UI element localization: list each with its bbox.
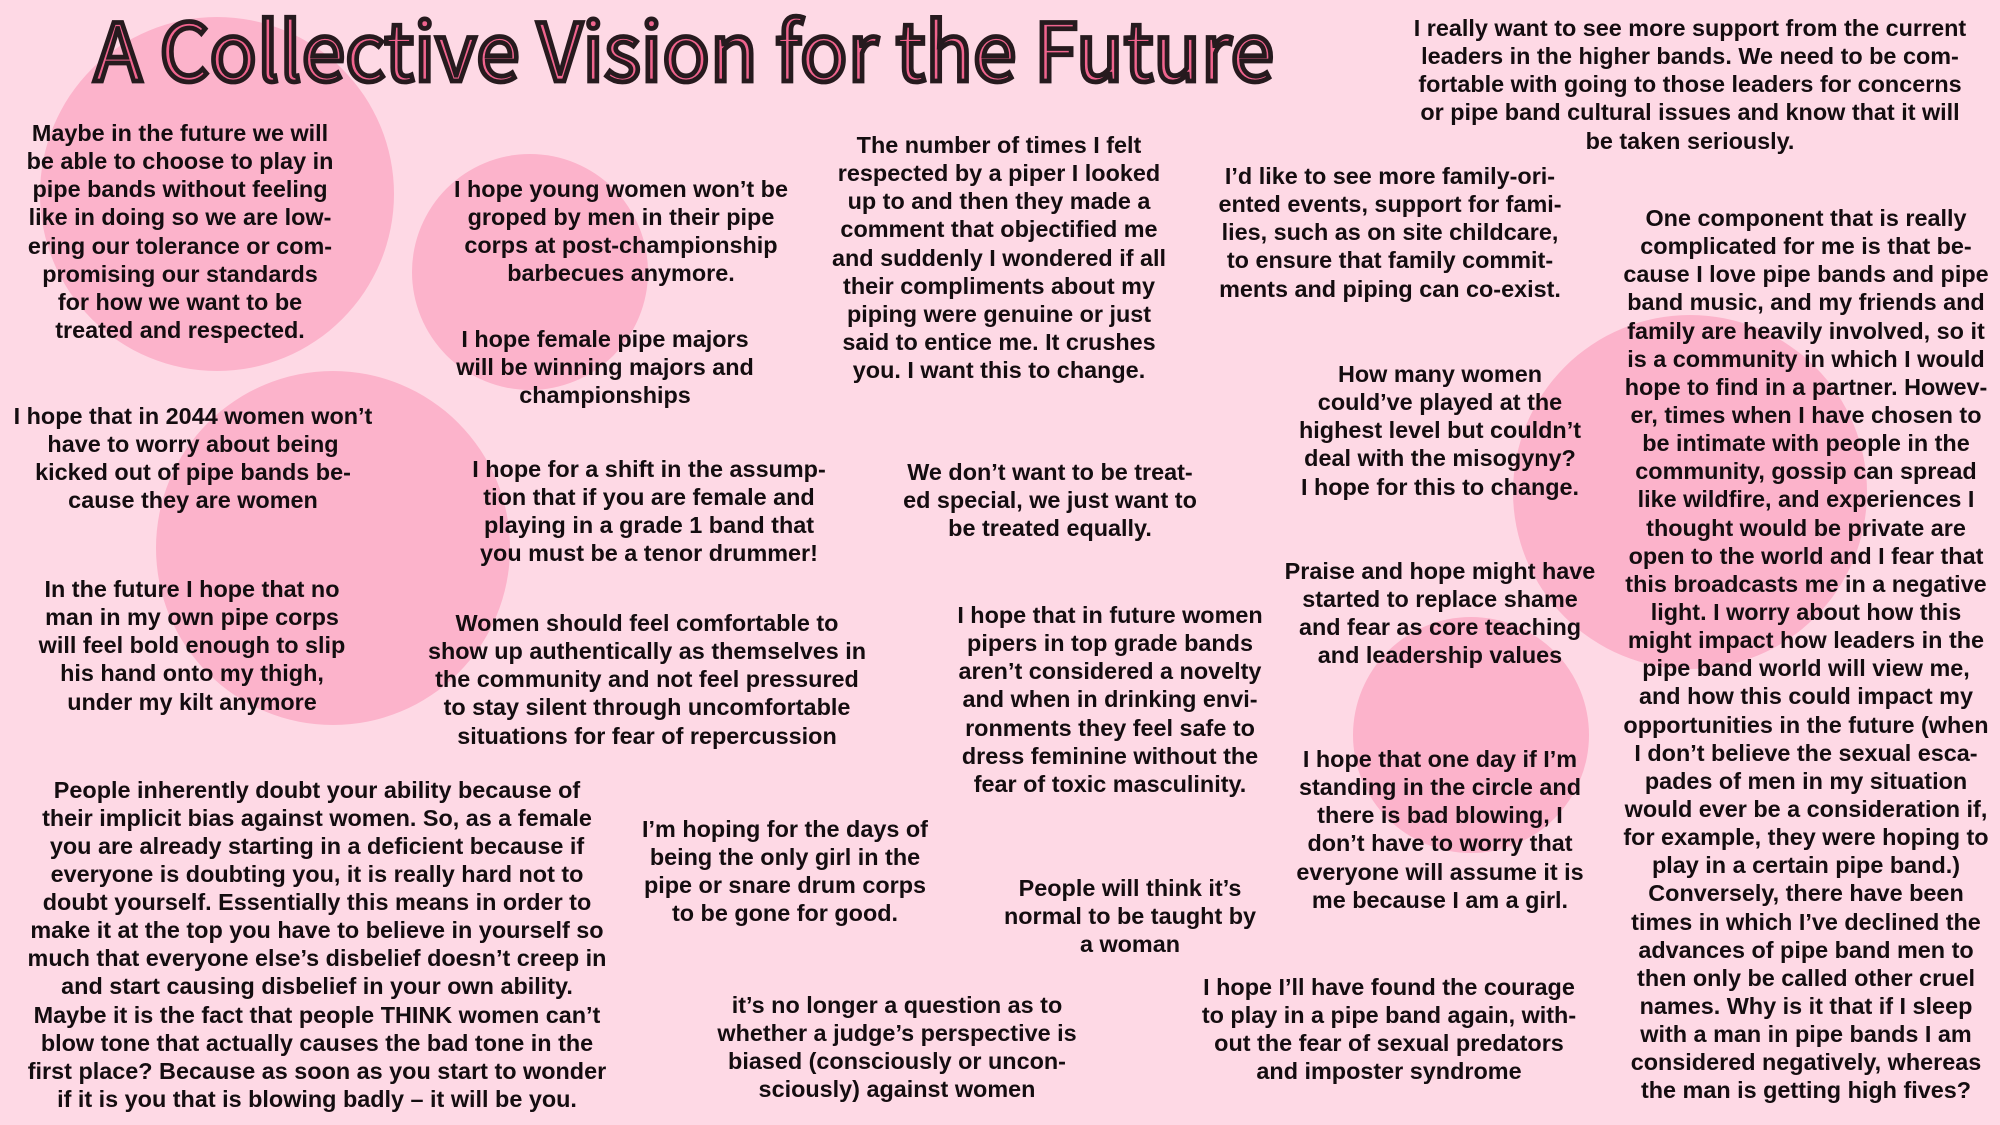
text block: complicated community: advances of pipe band men to	[1638, 937, 1974, 963]
text block: top grade bands: and when in drinking envi-	[962, 686, 1258, 712]
text block: family events: ented events, support for fami-	[1218, 191, 1562, 217]
text block: inherent doubt	[28, 776, 606, 1112]
text block: family events	[1218, 163, 1562, 302]
text block: complicated community: Conversely, there have been	[1648, 880, 1964, 906]
text block: found the courage: I hope I’ll have found the courage	[1203, 974, 1575, 1000]
text block: 2044: I hope that in 2044 women won’t	[14, 403, 372, 429]
text block: standing in the circle	[1296, 746, 1584, 913]
text block: found the courage	[1202, 974, 1576, 1084]
text block: respected by a piper: their compliments about my	[843, 273, 1155, 299]
text block: inherent doubt: and start causing disbelief in your own ability.	[61, 973, 573, 999]
text block: inherent doubt: doubt yourself. Essentially this means in order to	[43, 889, 591, 915]
text block: standing in the circle: there is bad blowing, I	[1317, 802, 1563, 828]
text block: maybe in the future: pipe bands without feeling	[33, 176, 327, 202]
text block: inherent doubt: much that everyone else’s disbelief doesn’t creep in	[28, 945, 606, 971]
text block: inherent doubt: if it is you that is blowing badly – it will be you.	[57, 1086, 577, 1112]
text block: complicated community: I don’t believe the sexual esca-	[1634, 740, 1978, 766]
text block: found the courage: to play in a pipe band again, with-	[1202, 1002, 1576, 1028]
text block: 2044: kicked out of pipe bands be-	[35, 459, 351, 485]
text block: female pipe majors: championships	[519, 382, 691, 408]
text block: leaders support: leaders in the higher bands. We need to be com-	[1421, 43, 1959, 69]
text block: respected by a piper: piping were genuine or just	[847, 301, 1151, 327]
text block: complicated community: pades of men in my situation	[1645, 768, 1967, 794]
text block: in my own pipe corps: In the future I hope that no	[45, 576, 339, 602]
text block: how many women	[1299, 361, 1581, 500]
text block: judge's perspective	[717, 992, 1077, 1102]
text block: complicated community: would ever be a consideration if,	[1625, 796, 1987, 822]
text block: show up authentically: Women should feel comfortable to	[456, 610, 838, 636]
text block: complicated community: er, times when I have chosen to	[1631, 402, 1981, 428]
text block: only girl: pipe or snare drum corps	[644, 872, 926, 898]
text block: top grade bands: ronments they feel safe to	[965, 715, 1255, 741]
text block: maybe in the future: promising our standards	[42, 261, 318, 287]
text block: young women: corps at post-championship	[464, 232, 778, 258]
text block: complicated community: like wildfire, and experiences I	[1638, 486, 1974, 512]
text block: maybe in the future: be able to choose to play in	[27, 148, 333, 174]
text block: 2044: cause they are women	[68, 487, 318, 513]
text block: maybe in the future: treated and respected.	[55, 317, 305, 343]
text block: complicated community: hope to find in a partner. Howev-	[1625, 374, 1987, 400]
text block: treated equally: We don’t want to be treat-	[907, 459, 1193, 485]
text block: complicated community: play in a certain pipe band.)	[1652, 852, 1960, 878]
text block: tenor drummer: I hope for a shift in the assump-	[472, 456, 826, 482]
text block: top grade bands: dress feminine without the	[962, 743, 1258, 769]
text block: complicated community: times in which I’ve declined the	[1631, 909, 1981, 935]
text block: inherent doubt: Maybe it is the fact that people THINK women can’t	[34, 1002, 600, 1028]
text block: family events: I’d like to see more family-ori-	[1225, 163, 1555, 189]
text block: respected by a piper: said to entice me. It crushes	[842, 329, 1156, 355]
text block: found the courage: and imposter syndrome	[1256, 1058, 1522, 1084]
text block: inherent doubt: first place? Because as soon as you start to wonder	[28, 1058, 606, 1084]
text block: show up authentically: to stay silent through uncomfortable	[444, 694, 850, 720]
text block: young women: I hope young women won’t be	[454, 176, 788, 202]
text block: only girl: I’m hoping for the days of	[642, 816, 928, 842]
text block: maybe in the future: like in doing so we are low-	[29, 204, 331, 230]
text block: respected by a piper: respected by a piper I looked	[838, 160, 1160, 186]
text block: complicated community: for example, they were hoping to	[1623, 824, 1989, 850]
text block: female pipe majors: will be winning majors and	[456, 354, 754, 380]
text block: complicated community: One component that is really	[1645, 205, 1967, 231]
text block: maybe in the future	[27, 120, 333, 343]
text block: judge's perspective: it’s no longer a question as to	[732, 992, 1062, 1018]
text block: complicated community: and how this could impact my	[1639, 683, 1973, 709]
text block: taught by a woman: a woman	[1080, 931, 1180, 957]
text block: standing in the circle: me because I am a girl.	[1312, 887, 1568, 913]
text block: female pipe majors	[456, 326, 754, 408]
text block: inherent doubt: their implicit bias against women. So, as a female	[42, 805, 592, 831]
text block: complicated community: cause I love pipe bands and pipe	[1623, 261, 1989, 287]
text block: judge's perspective: biased (consciously or uncon-	[728, 1048, 1066, 1074]
text block: treated equally	[903, 459, 1197, 541]
text block: 2044	[14, 403, 372, 513]
text block: complicated community: opportunities in the future (when	[1623, 712, 1989, 738]
text block: standing in the circle: I hope that one day if I’m	[1303, 746, 1577, 772]
text block: young women: groped by men in their pipe	[468, 204, 774, 230]
text block: praise and hope: and fear as core teaching	[1299, 614, 1581, 640]
text block: complicated community: light. I worry about how this	[1651, 599, 1961, 625]
text block: taught by a woman: normal to be taught by	[1004, 903, 1256, 929]
text block: praise and hope	[1285, 558, 1595, 668]
text block: complicated community: names. Why is it that if I sleep	[1640, 993, 1972, 1019]
text block: complicated community: complicated for me is that be-	[1640, 233, 1972, 259]
text block: how many women: deal with the misogyny?	[1304, 445, 1576, 471]
text block: how many women: highest level but couldn’t	[1299, 417, 1581, 443]
text block: family events: lies, such as on site childcare,	[1222, 219, 1558, 245]
text block: complicated community: this broadcasts me in a negative	[1625, 571, 1987, 597]
text block: family events: to ensure that family commit-	[1227, 247, 1553, 273]
text block: inherent doubt: make it at the top you have to believe in yourself so	[30, 917, 604, 943]
text block: leaders support: fortable with going to those leaders for concerns	[1418, 71, 1962, 97]
text block: complicated community: the man is getting high fives?	[1641, 1077, 1971, 1103]
text block: praise and hope: Praise and hope might have	[1285, 558, 1595, 584]
text block: young women: barbecues anymore.	[507, 260, 735, 286]
text block: complicated community: thought would be private are	[1646, 515, 1966, 541]
text block: standing in the circle: everyone will assume it is	[1296, 859, 1584, 885]
text block: inherent doubt: everyone is doubting you, it is really hard not to	[51, 861, 583, 887]
text block: only girl: to be gone for good.	[672, 900, 898, 926]
text block: complicated community: open to the world and I fear that	[1629, 543, 1983, 569]
text block: maybe in the future: for how we want to be	[58, 289, 302, 315]
text block: in my own pipe corps: will feel bold enough to slip	[39, 632, 345, 658]
text block: how many women: How many women	[1338, 361, 1542, 387]
text block: family events: ments and piping can co-exist.	[1219, 276, 1561, 302]
text block: how many women: I hope for this to change.	[1301, 474, 1579, 500]
text block: respected by a piper: comment that objectified me	[840, 216, 1158, 242]
text block: tenor drummer: tion that if you are female and	[483, 484, 815, 510]
text block: 2044: have to worry about being	[47, 431, 339, 457]
text block: treated equally: be treated equally.	[948, 515, 1152, 541]
text block: inherent doubt: you are already starting in a deficient because if	[50, 833, 584, 859]
text block: in my own pipe corps: man in my own pipe corps	[45, 604, 339, 630]
text block: standing in the circle: don’t have to worry that	[1307, 830, 1573, 856]
text block: only girl: being the only girl in the	[650, 844, 920, 870]
text block: inherent doubt: blow tone that actually causes the bad tone in the	[41, 1030, 593, 1056]
text block: respected by a piper: and suddenly I wondered if all	[832, 245, 1166, 271]
text block: respected by a piper	[832, 132, 1166, 383]
text block: inherent doubt: People inherently doubt your ability because of	[54, 776, 580, 802]
text block: complicated community: band music, and my friends and	[1627, 289, 1985, 315]
text block: complicated community: is a community in which I would	[1627, 346, 1985, 372]
text block: leaders support: be taken seriously.	[1586, 128, 1794, 154]
text block: complicated community	[1623, 205, 1989, 1103]
text block: complicated community: considered negatively, whereas	[1631, 1049, 1981, 1075]
text block: show up authentically: show up authentically as themselves in	[428, 638, 866, 664]
text block: leaders support: I really want to see more support from the current	[1414, 15, 1966, 41]
text block: top grade bands: aren’t considered a novelty	[959, 658, 1261, 684]
text block: complicated community: be intimate with people in the	[1642, 430, 1970, 456]
text block: taught by a woman	[1004, 875, 1256, 957]
text block: maybe in the future: ering our tolerance or com-	[28, 233, 332, 259]
text block: in my own pipe corps: under my kilt anymore	[67, 689, 317, 715]
text block: tenor drummer	[472, 456, 826, 566]
text block: maybe in the future: Maybe in the future we will	[32, 120, 328, 146]
text block: tenor drummer: playing in a grade 1 band that	[484, 512, 814, 538]
text block: praise and hope: and leadership values	[1318, 642, 1562, 668]
text block: complicated community: family are heavily involved, so it	[1627, 318, 1985, 344]
text block: leaders support	[1414, 15, 1966, 154]
text block: young women	[454, 176, 788, 286]
text block: show up authentically: the community and not feel pressured	[435, 666, 859, 692]
text block: respected by a piper: up to and then they made a	[848, 188, 1150, 214]
text block: in my own pipe corps: his hand onto my thigh,	[60, 660, 324, 686]
text block: treated equally: ed special, we just want to	[903, 487, 1197, 513]
text block: complicated community: community, gossip can spread	[1635, 458, 1977, 484]
text block: complicated community: might impact how leaders in the	[1628, 627, 1984, 653]
text block: praise and hope: started to replace shame	[1302, 586, 1578, 612]
text block: top grade bands	[957, 602, 1263, 797]
text block: top grade bands: pipers in top grade bands	[967, 630, 1253, 656]
text block: only girl	[642, 816, 928, 926]
text block: show up authentically: situations for fear of repercussion	[457, 723, 837, 749]
text block: respected by a piper: you. I want this to change.	[853, 357, 1145, 383]
text block: respected by a piper: The number of times I felt	[857, 132, 1141, 158]
text block: judge's perspective: whether a judge’s perspective is	[717, 1020, 1077, 1046]
text block: complicated community: then only be called other cruel	[1637, 965, 1975, 991]
text block: leaders support: or pipe band cultural issues and know that it will	[1420, 99, 1960, 125]
text block: top grade bands: fear of toxic masculinity.	[974, 771, 1246, 797]
text block: complicated community: pipe band world will view me,	[1642, 655, 1970, 681]
text block: top grade bands: I hope that in future women	[957, 602, 1263, 628]
text block: tenor drummer: you must be a tenor drummer!	[480, 540, 818, 566]
text block: female pipe majors: I hope female pipe majors	[461, 326, 749, 352]
text block: standing in the circle: standing in the circle and	[1299, 774, 1581, 800]
text block: show up authentically	[428, 610, 866, 749]
text block: in my own pipe corps	[38, 576, 345, 715]
text block: complicated community: with a man in pipe bands I am	[1640, 1021, 1972, 1047]
text block: judge's perspective: sciously) against women	[759, 1076, 1035, 1102]
text block: found the courage: out the fear of sexual predators	[1214, 1030, 1564, 1056]
text block: how many women: could’ve played at the	[1318, 389, 1562, 415]
text block: taught by a woman: People will think it’s	[1019, 875, 1241, 901]
